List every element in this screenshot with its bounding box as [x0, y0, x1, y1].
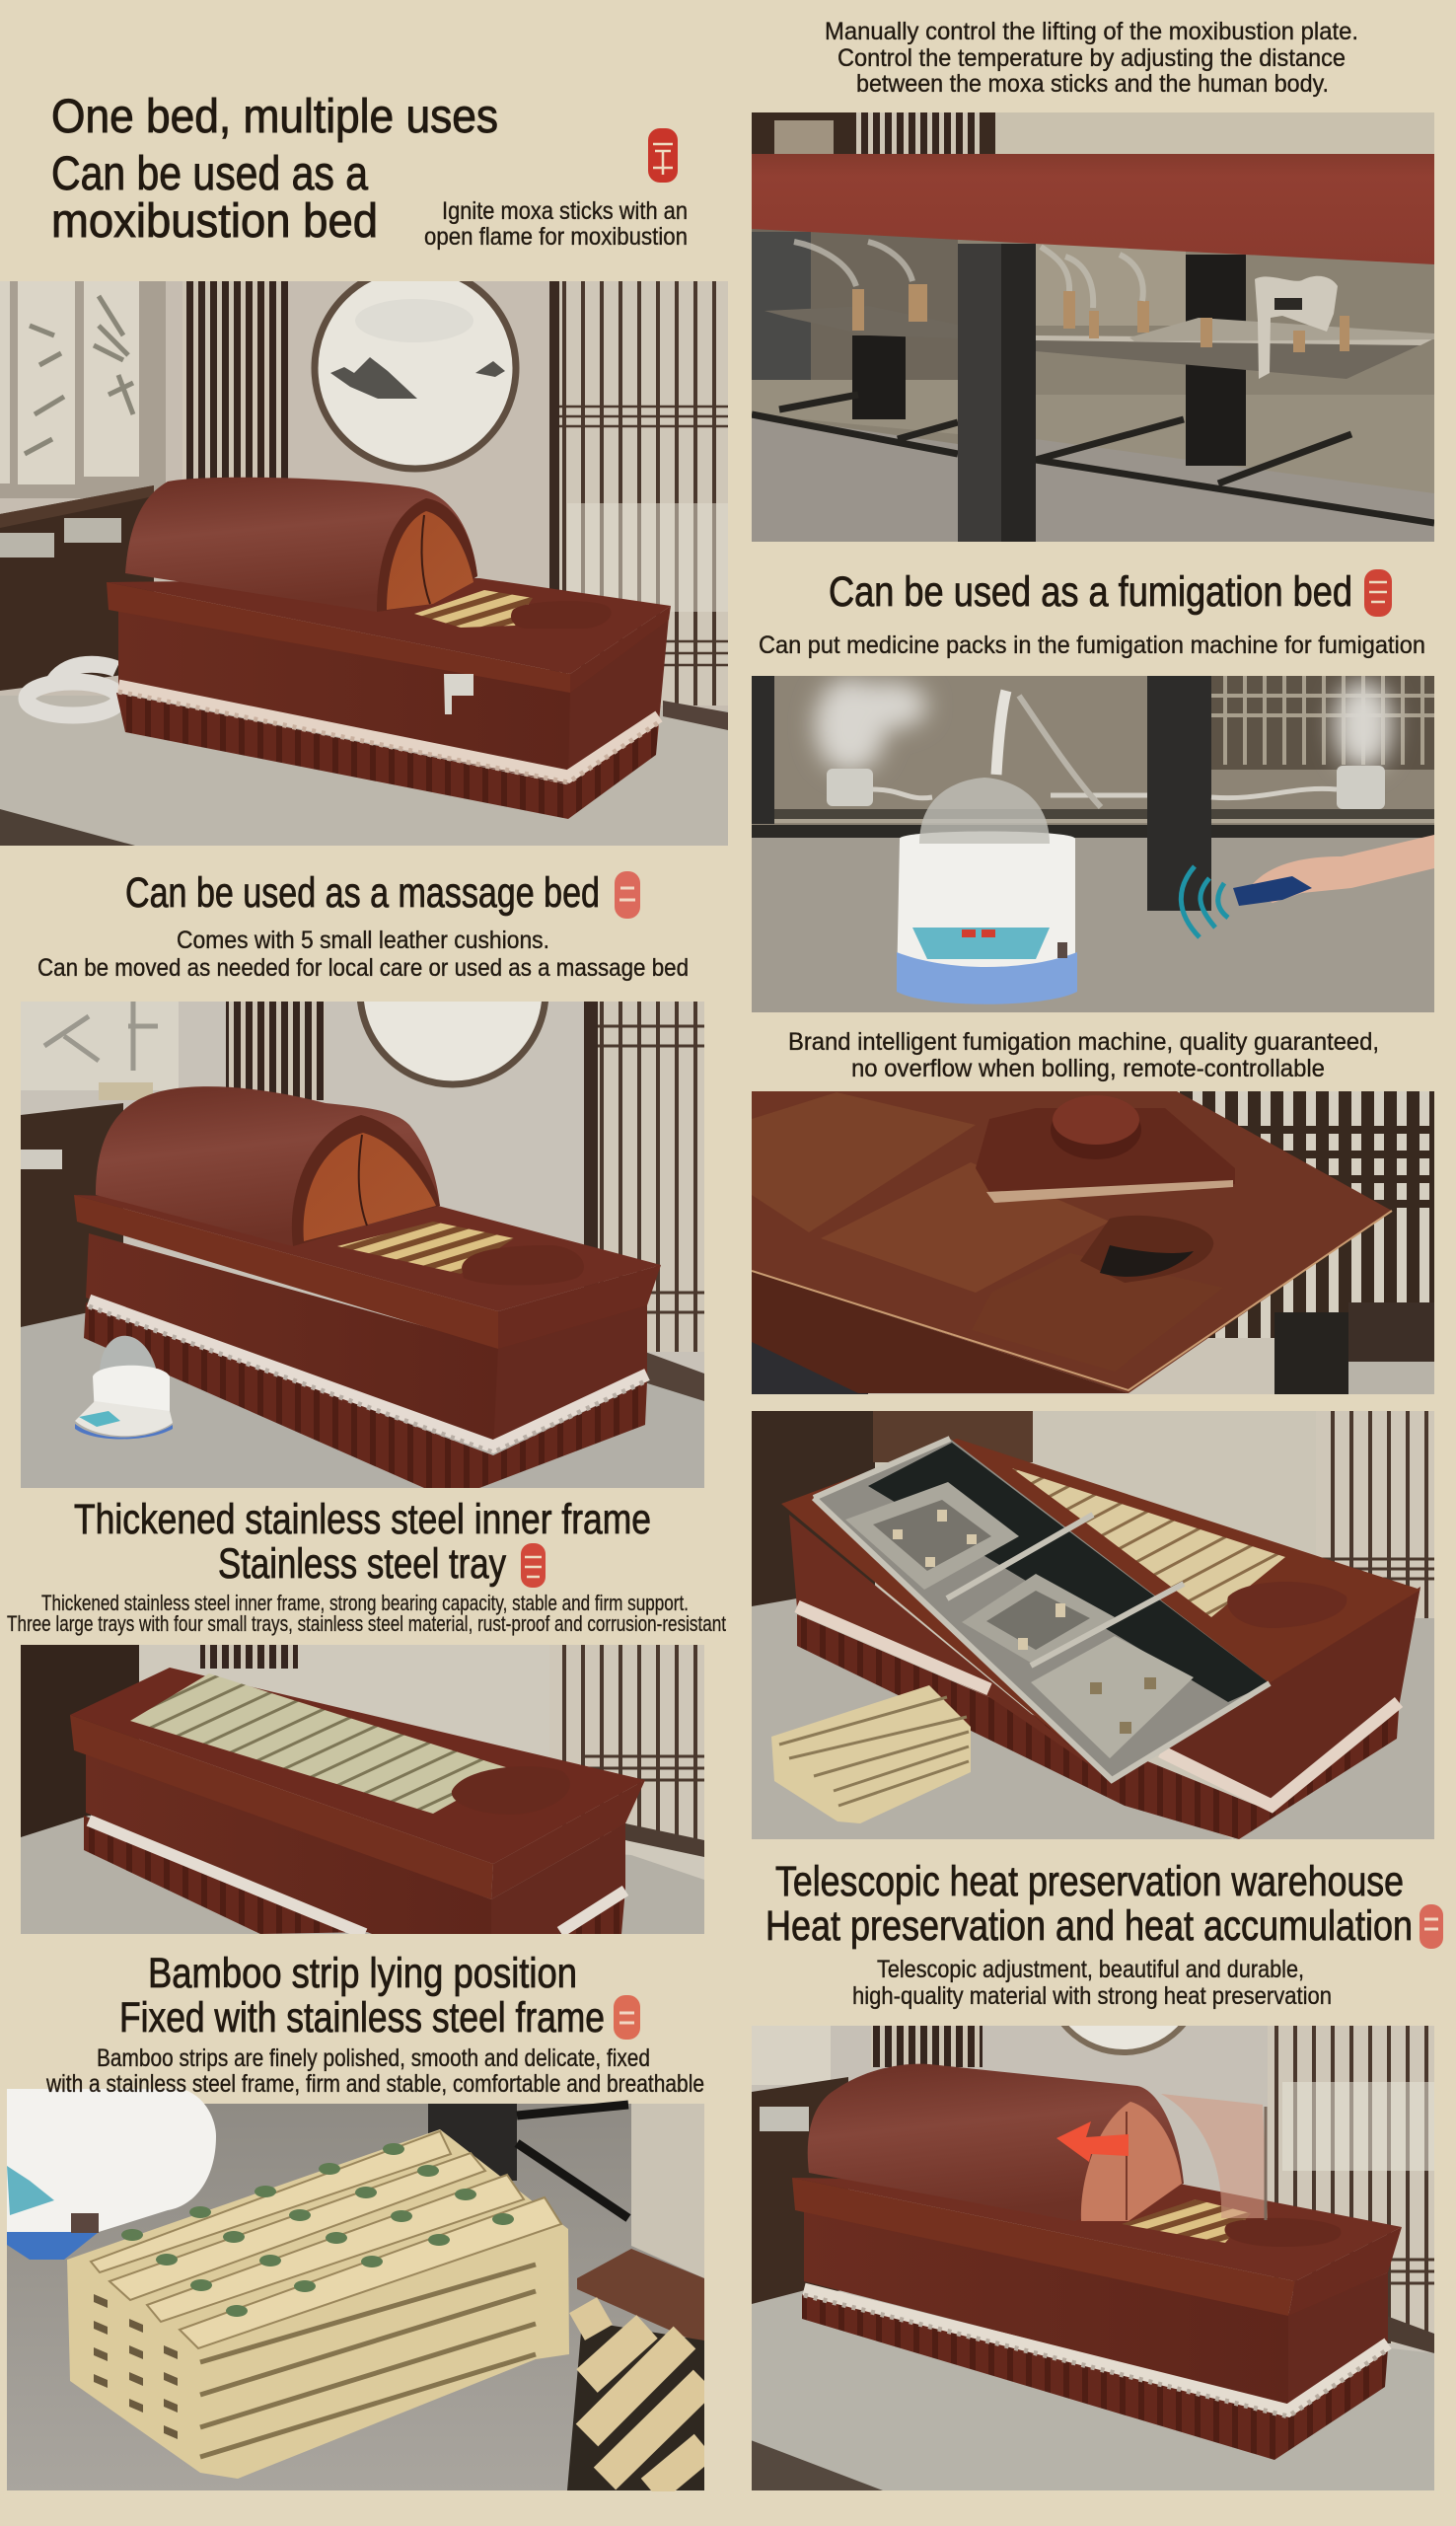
text: leather cushions — [37, 927, 689, 982]
text: bamboo detail: with a stainless steel frame, firm and stable, comfortable and breathable — [45, 2070, 704, 2098]
bamboo slats — [337, 1222, 514, 1274]
left lattice — [226, 1002, 325, 1100]
head pillow — [452, 1766, 570, 1815]
bed body side — [491, 1823, 625, 1934]
stitched edge — [752, 1211, 1392, 1390]
wall — [752, 2026, 1434, 2490]
top lattice — [200, 1645, 298, 1669]
round painting — [1046, 1896, 1201, 2052]
wall — [752, 1411, 1434, 1839]
text: brand machine — [788, 1028, 1379, 1082]
white machine body — [7, 2089, 216, 2260]
wall — [752, 1091, 1434, 1394]
leather top beam — [752, 154, 1434, 264]
head pillow — [1227, 1582, 1347, 1628]
right lattice — [549, 1645, 704, 1857]
dark under-bed area — [752, 1327, 868, 1394]
stack notches — [94, 2294, 178, 2439]
floor strip — [751, 2440, 883, 2490]
black liner — [868, 1443, 1270, 1702]
small bamboo stack — [771, 1685, 971, 1823]
latch window — [1274, 298, 1302, 310]
heading: bamboo strip: Bamboo strip lying position — [148, 1950, 577, 1997]
lattice — [1211, 676, 1434, 770]
signal arcs — [1181, 866, 1228, 937]
hanging scrolls — [0, 281, 166, 498]
heading: bamboo strip — [119, 1950, 605, 2042]
red arrow — [1056, 2121, 1128, 2162]
right wall — [631, 2104, 704, 2278]
bed skirt — [84, 1816, 625, 1934]
wall — [0, 281, 728, 846]
lower frame bars — [752, 395, 1434, 523]
control latch — [1255, 276, 1338, 379]
text: inner frame detail: Three large trays with four small trays, stainless steel material, rust-proof and corrusion-resistant — [7, 1611, 726, 1636]
bed body side — [1288, 2272, 1388, 2406]
bed body front — [804, 2205, 1288, 2406]
panel: fumigation machine with remote — [752, 676, 1434, 1012]
round landscape painting — [315, 267, 516, 469]
left lattice — [871, 2026, 983, 2067]
panel: stainless steel tray view — [752, 1411, 1434, 1839]
floor — [21, 1816, 704, 1934]
seal 2 — [1364, 569, 1392, 617]
pad highlight — [986, 1180, 1233, 1203]
back floor band — [752, 380, 1434, 493]
extended ghost dome — [1161, 2094, 1268, 2218]
heading: massage bed: Can be used as a massage bed — [125, 869, 600, 917]
panel: massage bed with fumigation machine — [21, 1002, 704, 1488]
fumigation machine — [75, 1336, 173, 1439]
panel: moxibustion bed photo — [0, 281, 728, 846]
bed skirt — [797, 1614, 1399, 1839]
table leg — [428, 2104, 628, 2218]
shelf and cabinet — [752, 2026, 848, 2305]
bamboo slats — [414, 590, 533, 628]
steel tray 1 — [845, 1482, 1019, 1590]
carpet floor — [7, 2104, 704, 2490]
bed body front — [86, 1746, 491, 1934]
steam clouds — [815, 678, 1393, 773]
text: brand machine: Brand intelligent fumigation machine, quality guaranteed, — [788, 1028, 1379, 1056]
darker left wall — [752, 222, 958, 400]
bed top — [752, 1091, 1392, 1393]
hand and arm — [1251, 835, 1434, 903]
lace trim — [797, 1606, 1399, 1806]
lace trim — [118, 686, 659, 782]
back wall — [752, 676, 1434, 849]
dome front opening — [292, 1115, 440, 1246]
bed slats below — [567, 2311, 704, 2490]
remote — [1233, 876, 1312, 906]
bed body front — [86, 1233, 498, 1449]
dark cabinet — [21, 1645, 139, 1837]
heading: fumigation bed: Can be used as a fumigation bed — [829, 568, 1352, 616]
heading: one bed, moxibustion: One bed, multiple uses — [51, 91, 498, 143]
near table leg — [958, 244, 1036, 542]
glass dome — [919, 778, 1050, 844]
bed top slab — [792, 2178, 1402, 2316]
stacked bamboo base — [67, 2129, 569, 2479]
floor — [752, 2289, 1434, 2490]
head pillow — [462, 1245, 584, 1285]
text: ignite moxa: Ignite moxa sticks with an — [442, 197, 688, 225]
seal 1 — [648, 128, 678, 183]
right lattice screen — [549, 281, 728, 706]
bed skirt — [116, 693, 659, 819]
text: telescopic detail — [852, 1956, 1332, 2010]
bamboo strip mat — [130, 1673, 512, 1814]
text: telescopic detail: high-quality material with strong heat preservation — [852, 1982, 1332, 2010]
wall — [21, 1645, 704, 1934]
text: inner frame detail — [7, 1591, 726, 1636]
heading: bamboo strip: Fixed with stainless steel frame — [119, 1994, 605, 2042]
moxa trays — [764, 306, 1434, 379]
cushions — [752, 1092, 1223, 1372]
hoses — [873, 788, 1337, 798]
text: ignite moxa: open flame for moxibustion — [424, 223, 688, 251]
face hole — [1080, 1216, 1213, 1283]
bed body side — [568, 617, 669, 784]
lighter wall panel — [1036, 237, 1186, 326]
left lattice screen — [182, 281, 288, 483]
wall — [21, 1002, 704, 1488]
heading: one bed, moxibustion: Can be used as a — [51, 148, 368, 200]
floor — [0, 696, 728, 846]
bamboo slats — [1012, 1468, 1285, 1617]
bed side faces — [789, 1515, 1420, 1802]
text: leather cushions: Comes with 5 small leather cushions. — [177, 927, 549, 954]
text: bamboo detail: Bamboo strips are finely polished, smooth and delicate, fixed — [97, 2044, 650, 2072]
panel: telescopic heat preservation photo — [752, 2026, 1434, 2490]
heading: stainless frame — [74, 1496, 651, 1588]
machine tube — [996, 691, 1101, 807]
heading: one bed, moxibustion — [51, 91, 498, 248]
scroll paintings — [21, 1002, 179, 1090]
lace trim — [89, 1300, 647, 1452]
moxa sticks — [852, 284, 1349, 352]
panel: bamboo slats close-up — [7, 2089, 704, 2491]
floor — [752, 836, 1434, 1012]
lace trim — [89, 1820, 625, 1934]
dome front opening — [1081, 2102, 1182, 2221]
heading: stainless frame: Stainless steel tray — [218, 1540, 506, 1588]
bed top slab — [107, 578, 671, 693]
text: bamboo detail — [45, 2044, 704, 2098]
text: leather cushions: Can be moved as needed for local care or used as a massage bed — [37, 954, 689, 982]
machine body — [897, 831, 1077, 1004]
background wall — [752, 112, 1434, 542]
head rest pad — [976, 1108, 1235, 1201]
seal 4 — [521, 1543, 546, 1588]
dome front opening — [377, 498, 477, 612]
text: ignite moxa — [424, 197, 688, 251]
leather dome — [125, 478, 477, 612]
right lattice — [1316, 1411, 1434, 1633]
leather dome — [96, 1086, 440, 1246]
text: medicine packs: Can put medicine packs in the fumigation machine for fumigation — [759, 632, 1425, 659]
bed body side — [493, 1302, 647, 1449]
left shelf cabinet — [21, 1082, 153, 1327]
smoke trails — [794, 242, 1143, 308]
seal 6 — [1420, 1904, 1443, 1949]
text: manual lift: between the moxa sticks and the human body. — [856, 70, 1329, 98]
panel: lifting plate close-up — [752, 112, 1434, 542]
post — [1265, 2107, 1267, 2220]
frame cross bars — [814, 1439, 1270, 1780]
table legs — [752, 676, 1211, 911]
wooden bed edge — [577, 2249, 704, 2345]
steel tray 2 — [962, 1574, 1115, 1666]
heading: one bed, moxibustion: moxibustion bed — [51, 195, 378, 248]
right lattice — [584, 1002, 704, 1401]
side cabinet — [0, 485, 154, 691]
moxa holes — [121, 2143, 514, 2317]
panel: bamboo lying position photo — [21, 1645, 704, 1934]
bed skirt — [802, 2294, 1388, 2460]
carpet floor — [752, 414, 1434, 542]
drawer frame — [814, 1439, 1270, 1780]
bed side — [752, 1271, 1128, 1393]
bed top — [781, 1439, 1420, 1780]
text: manual lift: Control the temperature by adjusting the distance — [837, 44, 1346, 72]
head pillow — [511, 601, 612, 629]
text: manual lift: Manually control the lifting of the moxibustion plate. — [825, 18, 1358, 45]
bamboo slats — [1122, 2199, 1251, 2243]
round top pad — [1051, 1095, 1141, 1159]
cabinet and back screen — [752, 1411, 1033, 1608]
dark leg and floor — [1274, 1302, 1434, 1394]
floor — [21, 1312, 704, 1488]
seal 3 — [615, 871, 640, 919]
text: brand machine: no overflow when bolling, remote-controllable — [851, 1055, 1325, 1082]
floor — [752, 1598, 1434, 1839]
upper wall and lattice — [752, 112, 1434, 156]
text: telescopic detail: Telescopic adjustment, beautiful and durable, — [877, 1956, 1304, 1983]
top bamboo slats — [91, 2131, 561, 2348]
lace trim — [804, 2289, 1388, 2416]
text: manual lift — [825, 18, 1358, 98]
text: inner frame detail: Thickened stainless steel inner frame, strong bearing capacity, stable and firm support. — [41, 1591, 689, 1615]
heading: telescopic — [765, 1858, 1413, 1950]
leather dome — [808, 2064, 1184, 2221]
frame rails — [752, 809, 1434, 838]
panel: massage bed with head hole — [752, 1091, 1434, 1394]
lattice — [1177, 1091, 1434, 1338]
stack layer lines — [200, 2265, 536, 2457]
head pillow — [1225, 2218, 1341, 2247]
back legs — [752, 232, 1246, 466]
metal latch — [444, 674, 473, 714]
steel tray 3 — [1031, 1636, 1194, 1758]
steam cups — [827, 766, 1385, 809]
white hose coil — [27, 664, 119, 715]
round painting — [360, 899, 546, 1084]
bed body front — [118, 610, 570, 784]
bed top slab — [74, 1195, 661, 1349]
right lattice — [1268, 2026, 1434, 2353]
bed top — [70, 1668, 645, 1899]
seal 5 — [614, 1995, 640, 2040]
heading: stainless frame: Thickened stainless steel inner frame — [74, 1496, 651, 1543]
bed skirt — [84, 1302, 647, 1488]
